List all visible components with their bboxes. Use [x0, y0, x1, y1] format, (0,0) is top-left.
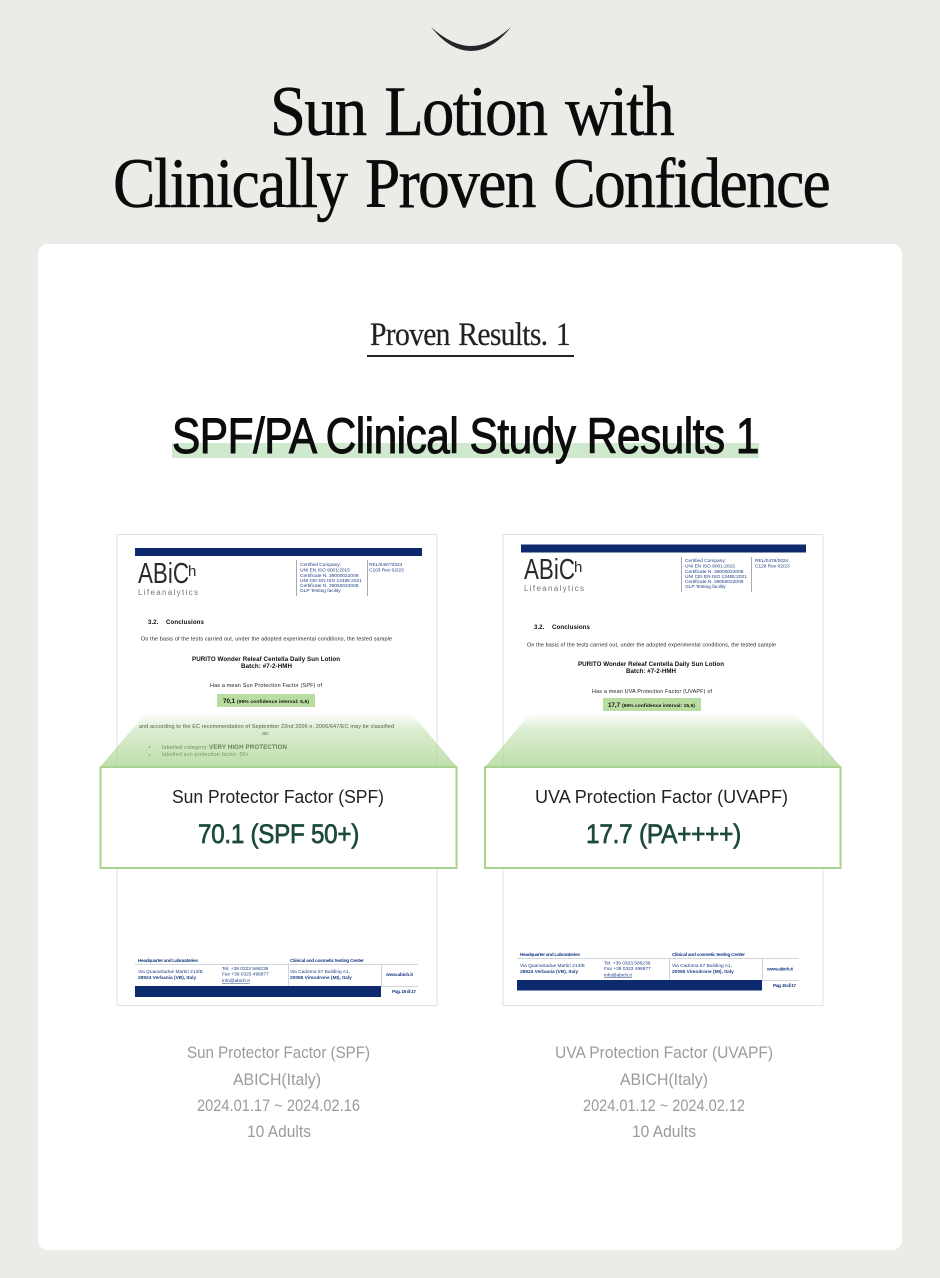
panel: SPF report document: PURITO Wonder Releaf Centella Daily Sun Lotion — [192, 656, 340, 663]
caption: SPF study details — [187, 1043, 370, 1141]
panel: SPF report document: Certificate N. 39000022008 — [300, 573, 359, 579]
panel: UVAPF report document — [503, 534, 823, 1006]
panel: UVAPF report document: Pag. 15 di 17 — [773, 983, 796, 989]
panel: UVAPF report document: Certificate N. 39000022008 — [685, 569, 744, 575]
panel: SPF report document: info@abich.it — [222, 978, 250, 984]
panel: SPF report document: labelled category: — [162, 745, 208, 751]
panel: SPF report document: 3.2. — [148, 619, 159, 626]
callout: SPF result: 70.1 (SPF 50+) — [198, 819, 359, 849]
panel: UVAPF report document: REL/0476/2024 — [755, 558, 789, 564]
panel: UVAPF report document: www.abich.it — [766, 966, 793, 972]
panel: UVAPF report document: Via Cadorna 67 Building A1, — [672, 963, 732, 969]
panel: UVAPF report document: Clinical and cosmetic testing Center — [672, 952, 745, 958]
panel: UVAPF report document: Has a mean UVA Protection Factor (UVAPF) of — [592, 689, 712, 695]
panel: UVAPF report document: 17,7 — [608, 702, 621, 709]
caption: SPF study details: ABICH(Italy) — [233, 1070, 321, 1089]
callout: UVAPF result — [485, 713, 841, 868]
panel: white results card — [38, 244, 902, 1250]
section label: Proven Results. 1 — [370, 317, 570, 353]
title: Sun Lotion with — [270, 73, 674, 151]
panel: SPF report document: as: — [262, 731, 269, 737]
panel: SPF report document: UNI EN ISO 9001:2015 — [300, 568, 350, 574]
panel: SPF report document: Clinical and cosmetic testing Center — [290, 958, 364, 964]
panel: SPF report document: Via Quarantadue Martiri 213/B — [138, 969, 203, 975]
panel: UVAPF report document: GLP Testing facility — [685, 584, 726, 590]
panel: SPF report document: Conclusions — [166, 619, 205, 626]
callout: UVAPF result: UVA Protection Factor (UVAPF) — [535, 786, 788, 807]
caption: SPF study details: 10 Adults — [247, 1122, 311, 1141]
caption: UVAPF study details: 10 Adults — [632, 1122, 696, 1141]
panel: UVAPF report document: 3.2. — [534, 624, 545, 631]
panel: SPF report document: Has a mean Sun Protection Factor (SPF) of — [210, 683, 322, 689]
panel: UVAPF report document: h — [574, 559, 582, 576]
panel: UVAPF report document: PURITO Wonder Releaf Centella Daily Sun Lotion — [578, 661, 724, 668]
callout: SPF result: Sun Protector Factor (SPF) — [172, 786, 384, 807]
panel: UVAPF report document: Fax +39 0323 496877 — [604, 966, 651, 972]
panel: SPF report document: ABiC — [138, 558, 189, 590]
callout: SPF result — [100, 713, 457, 868]
panel: UVAPF report document: Headquarter and Laboratories — [520, 952, 580, 958]
panel: UVAPF report document: Batch: #7-2-HMH — [626, 668, 677, 675]
panel: UVAPF report document: On the basis of the tests carried out, under the adopted experimental conditions, the tested sample — [527, 642, 776, 648]
panel: SPF report document: (95% confidence interval: 5,5) — [237, 699, 309, 705]
panel: SPF report document: h — [188, 563, 196, 580]
panel: SPF report document: Certificate N. 39050022008 — [300, 583, 359, 589]
panel: UVAPF report document: UNI CEI EN ISO 13485:2021 — [685, 574, 747, 580]
panel: SPF report document: REL/0487/2024 — [369, 562, 403, 568]
icon: smile crescent — [431, 27, 511, 51]
panel: UVAPF report document: (95% confidence interval: 15,9) — [622, 703, 695, 709]
panel: SPF report document: GLP Testing facility — [300, 588, 341, 594]
panel: SPF report document: Headquarter and Laboratories — [138, 958, 198, 964]
caption: UVAPF study details — [555, 1043, 773, 1141]
callout: UVAPF result: 17.7 (PA++++) — [586, 819, 741, 849]
panel: SPF report document: C103 Rev 02/23 — [369, 568, 404, 574]
panel: SPF report document: Certified Company: — [300, 562, 341, 568]
panel: SPF report document: 70,1 — [223, 698, 236, 705]
panel: SPF report document: On the basis of the tests carried out, under the adopted experimental conditions, the tested sample — [141, 636, 392, 642]
panel: UVAPF report document: Lifeanalytics — [524, 584, 584, 593]
panel: SPF report document: VERY HIGH PROTECTION — [209, 744, 288, 751]
panel: SPF report document: UNI CEI EN ISO 13485:2021 — [300, 578, 362, 584]
panel: UVAPF report document: UNI EN ISO 9001:2015 — [685, 564, 735, 570]
title — [113, 73, 829, 223]
caption: SPF study details: Sun Protector Factor (SPF) — [187, 1043, 370, 1062]
caption: UVAPF study details: 2024.01.12 ~ 2024.02.12 — [583, 1096, 745, 1115]
panel: SPF report document: 28924 Verbania (VB), Italy — [138, 975, 196, 981]
panel: SPF report document: and according to the EC recommendation of September 22nd 2006 n. 2006/647/EC may be classified — [139, 724, 394, 730]
title: Clinically Proven Confidence — [113, 145, 829, 223]
panel: SPF report document: labelled sun protection factor: 50+ — [162, 752, 249, 758]
panel: SPF report document: 20055 Vimodrone (MI), Italy — [290, 975, 352, 981]
panel: UVAPF report document: Via Quarantadue Martiri 213/B — [520, 963, 585, 969]
caption: SPF study details: 2024.01.17 ~ 2024.02.16 — [197, 1096, 360, 1115]
panel: UVAPF report document: Certified Company: — [685, 558, 726, 564]
panel: SPF report document: www.abich.it — [385, 972, 413, 978]
panel: UVAPF report document: info@abich.it — [604, 972, 632, 978]
panel: UVAPF report document: Certificate N. 39050022008 — [685, 579, 744, 585]
panel: UVAPF report document: Tel. +39 0323 586239 — [604, 960, 651, 966]
panel: SPF report document — [117, 534, 437, 1006]
panel: UVAPF report document: Conclusions — [552, 624, 591, 631]
panel: SPF report document: Via Cadorna 67 Building A1, — [290, 969, 350, 975]
panel: UVAPF report document: C128 Rev 02/23 — [755, 564, 790, 570]
panel: UVAPF report document: ABiC — [524, 554, 575, 586]
panel: UVAPF report document: 20055 Vimodrone (MI), Italy — [672, 969, 734, 975]
panel: UVAPF report document: 28924 Verbania (VB), Italy — [520, 969, 578, 975]
heading with highlight: SPF/PA Clinical Study Results 1 — [172, 408, 759, 464]
caption: UVAPF study details: UVA Protection Factor (UVAPF) — [555, 1043, 773, 1062]
panel: SPF report document: Batch: #7-2-HMH — [241, 663, 293, 670]
panel: SPF report document: Fax +39 0323 496877 — [222, 972, 269, 978]
panel: SPF report document: Pag. 15 di 17 — [392, 989, 416, 995]
caption: UVAPF study details: ABICH(Italy) — [620, 1070, 708, 1089]
panel: SPF report document: Lifeanalytics — [138, 588, 198, 597]
panel: SPF report document: Tel. +39 0323 586239 — [222, 966, 269, 972]
